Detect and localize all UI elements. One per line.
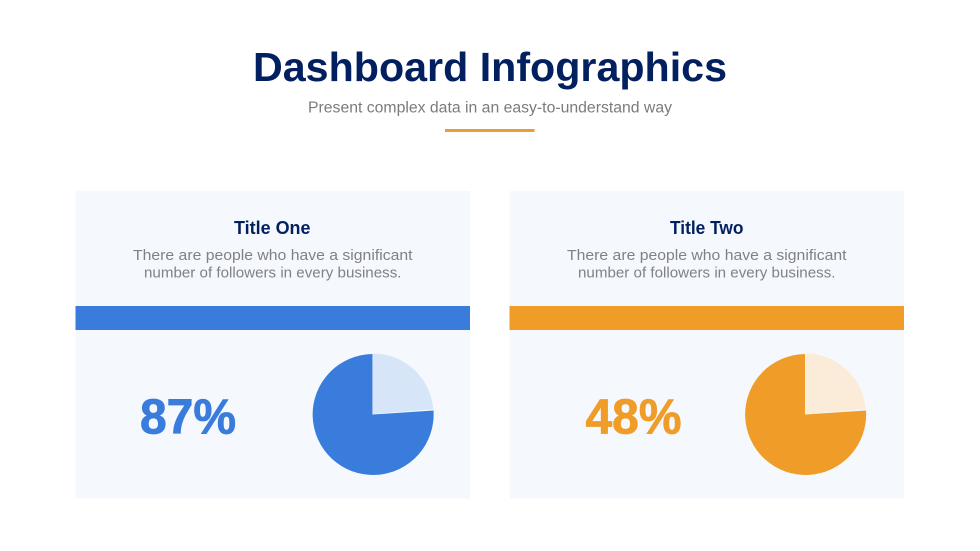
percentage value: 87% [140, 390, 236, 444]
orange band [510, 306, 904, 330]
description text: number of followers in every business. [144, 264, 402, 282]
title: Dashboard Infographics [253, 44, 727, 90]
subtitle: Present complex data in an easy-to-understand way [308, 100, 672, 116]
percentage value: 48% [586, 390, 682, 444]
description text: number of followers in every business. [578, 264, 836, 282]
panel: title two [510, 191, 904, 498]
description text: There are people who have a significant [133, 247, 413, 264]
pie chart [313, 354, 434, 475]
blue band [76, 306, 470, 330]
pie chart [745, 354, 866, 475]
description text [567, 247, 847, 282]
panel: title one [76, 191, 470, 498]
description text: There are people who have a significant [567, 247, 847, 264]
panel background [76, 191, 470, 498]
description text [133, 247, 413, 282]
heading: title one: Title One [234, 218, 310, 238]
heading: title two: Title Two [670, 218, 744, 238]
panel background [510, 191, 904, 498]
title underline [445, 129, 534, 132]
